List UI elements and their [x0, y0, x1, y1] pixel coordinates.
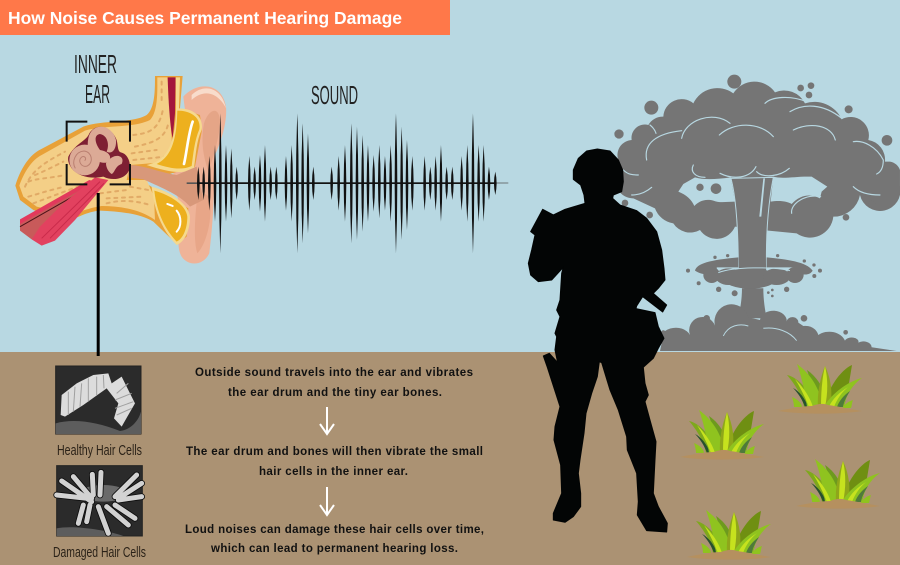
explanation step 1: Outside sound travels into the ear and vibrates [195, 367, 473, 379]
label: inner ear: INNER [74, 49, 117, 79]
lower fatty tissue [152, 187, 190, 245]
grass tuft 2 [680, 410, 764, 460]
explanation step 3 [185, 524, 484, 555]
step 1 second line: the ear drum and the tiny ear bones. [228, 387, 442, 399]
upper fatty tissue [147, 77, 202, 172]
ground [0, 352, 900, 565]
explanation step 3: Loud noises can damage these hair cells over time, [185, 524, 484, 536]
explanation step 1 [195, 367, 473, 399]
title: How Noise Causes Permanent Hearing Damage [8, 8, 402, 28]
mushroom cloud [614, 75, 900, 351]
arrow 2 [320, 487, 334, 515]
grass tuft 4 [687, 510, 771, 560]
ear canal [128, 165, 203, 207]
grass tuft 1 [778, 364, 862, 414]
holes in cloud [678, 177, 735, 206]
outer ear [173, 86, 226, 264]
smoke particles [614, 75, 892, 335]
ring of smoke [695, 257, 813, 289]
label: inner ear [74, 49, 117, 109]
label: sound: SOUND [311, 80, 358, 110]
caption: damaged hair cells: Damaged Hair Cells [53, 544, 146, 561]
cloud cap [616, 82, 900, 239]
explanation step 2 [186, 446, 483, 478]
inner ear [68, 127, 130, 179]
damaged hair cells photo [57, 466, 142, 536]
eustachian tube [20, 177, 108, 246]
stem [731, 177, 773, 271]
red membrane strip [168, 77, 176, 138]
cloud highlights [623, 97, 883, 213]
stem highlight [759, 178, 765, 217]
step 2 second line: hair cells in the inner ear. [259, 466, 408, 478]
ear cross-section illustration [15, 76, 226, 264]
inner ear focus bracket [67, 122, 130, 184]
healthy hair cells photo [56, 366, 141, 434]
title banner [0, 0, 450, 35]
temporal bone outline [15, 76, 202, 244]
wave baseline [187, 182, 508, 184]
arrow 1 [320, 407, 334, 434]
lower stem [740, 288, 766, 318]
sky background [0, 0, 900, 352]
caption: healthy hair cells: Healthy Hair Cells [57, 442, 142, 459]
base cloud [660, 304, 897, 351]
temporal bone [19, 77, 173, 220]
bone texture [25, 82, 168, 205]
connector line from inner ear to hair cells [97, 193, 100, 356]
explanation step 2: The ear drum and bones will then vibrate the small [186, 446, 483, 458]
sound wave [187, 113, 508, 253]
grass tuft 3 [796, 459, 880, 509]
step 3 second line: which can lead to permanent hearing loss. [210, 543, 458, 555]
soldier silhouette [528, 149, 667, 532]
label: inner ear: EAR [85, 79, 110, 109]
